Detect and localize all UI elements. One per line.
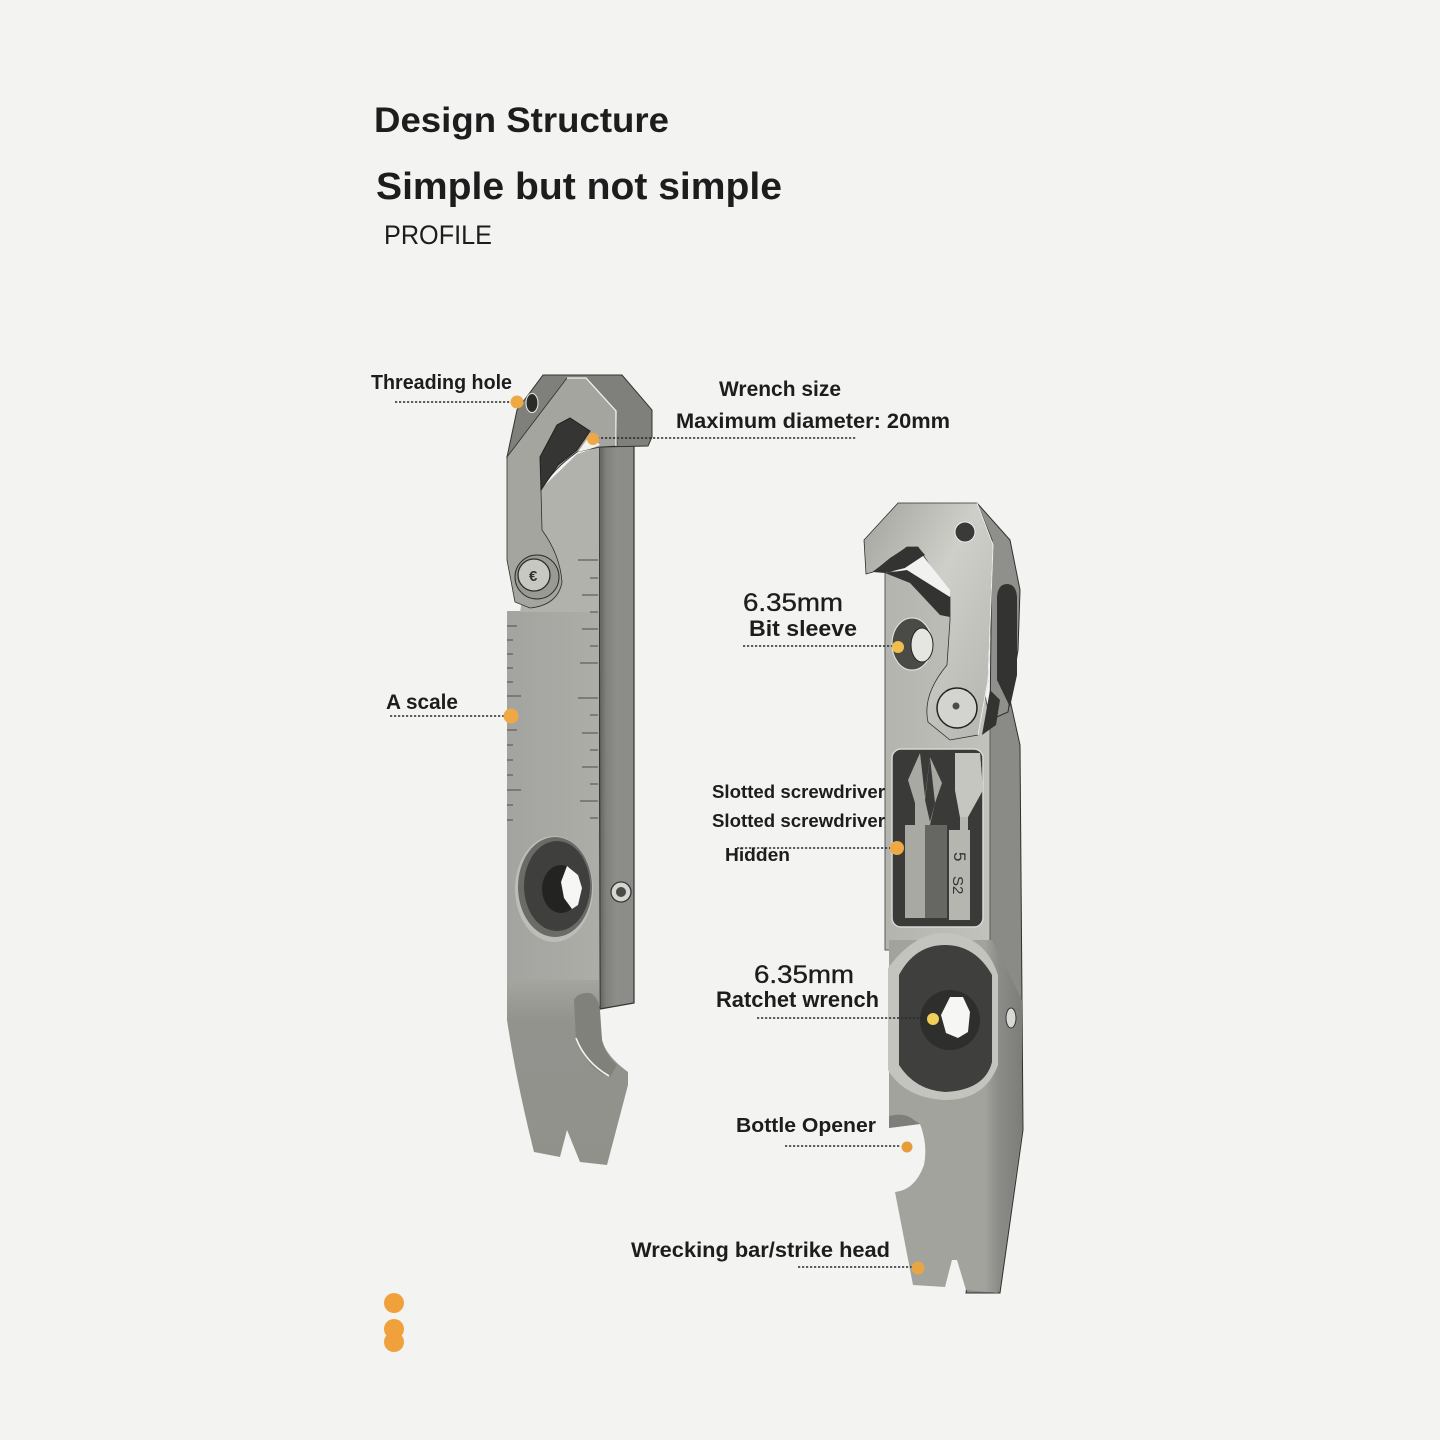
bottle opener notch [574, 993, 617, 1077]
shadow by lever [982, 690, 1000, 735]
callout: Wrench size [587, 378, 950, 445]
ratchet socket [515, 836, 593, 942]
jaw gap [905, 556, 950, 597]
pivot screw [515, 555, 559, 599]
slotted bit [949, 753, 983, 920]
ratchet hole [941, 997, 970, 1038]
scale body [507, 611, 599, 990]
ruler ticks [507, 560, 598, 820]
pivot screw [937, 688, 977, 728]
tool: right front view [864, 503, 1023, 1293]
callout: 6.35mm Bit sleeve [743, 589, 904, 653]
phillips bit [905, 753, 947, 918]
callout: Bottle Opener [736, 1115, 912, 1152]
lever front face [507, 378, 617, 608]
callout: Wrecking bar/strike head: Wrecking bar/strike head [631, 1239, 890, 1262]
callout: Wrench size: Wrench size [719, 378, 841, 401]
tool: left profile view [507, 375, 652, 1165]
callout: Threading hole: Threading hole [371, 372, 512, 394]
ratchet recess [888, 933, 998, 1100]
upper body behind lever [520, 447, 599, 612]
wrecking bar end [507, 980, 628, 1165]
callout: Threading hole [371, 372, 524, 408]
callout: Slotted screwdriver, Slotted screwdriver, Hidden: Slotted screwdriver [712, 781, 885, 802]
callout: Wrench size: Maximum diameter: 20mm [676, 410, 950, 433]
bit markings: 5 [950, 852, 969, 861]
ratchet hole [561, 866, 582, 909]
callout: 6.35mm Ratchet wrench: 6.35mm [754, 961, 854, 989]
title: Design Structure: Design Structure [374, 101, 669, 140]
callout: 6.35mm Ratchet wrench [716, 961, 939, 1025]
threading hole [526, 394, 538, 412]
callout: Slotted screwdriver, Slotted screwdriver, Hidden: Slotted screwdriver [712, 810, 885, 831]
back of head [507, 375, 652, 457]
callout: Wrecking bar/strike head [631, 1239, 924, 1274]
callout: 6.35mm Bit sleeve: 6.35mm [743, 589, 843, 617]
callout: Slotted screwdriver, Slotted screwdriver, Hidden [712, 781, 904, 865]
side screw [1006, 1008, 1016, 1028]
callout: A scale: A scale [386, 691, 458, 714]
callout: 6.35mm Ratchet wrench: Ratchet wrench [716, 987, 879, 1012]
threading hole [955, 522, 975, 542]
tool: left profile view: € [529, 568, 538, 585]
callout: Bottle Opener: Bottle Opener [736, 1115, 876, 1137]
jaw teeth [873, 547, 925, 573]
jaw opening [540, 418, 590, 490]
orange dots [384, 1293, 404, 1352]
wrench head [864, 503, 993, 740]
bit window [892, 749, 983, 927]
side screw [611, 882, 631, 902]
lower body with bottle opener [889, 940, 1022, 1293]
callout: 6.35mm Bit sleeve: Bit sleeve [749, 616, 857, 641]
callout: A scale [386, 691, 518, 724]
callout: Slotted screwdriver, Slotted screwdriver, Hidden: Hidden [725, 844, 790, 865]
back head with slot [977, 503, 1020, 720]
side bar [966, 700, 1023, 1293]
subtitle: Simple but not simple: Simple but not simple [376, 166, 782, 208]
side bar [599, 446, 634, 1009]
bit sleeve [892, 618, 932, 670]
tool: right front view: S2 [949, 876, 966, 894]
heading: PROFILE: PROFILE [384, 220, 492, 250]
main body [885, 572, 990, 950]
slot [997, 584, 1017, 707]
